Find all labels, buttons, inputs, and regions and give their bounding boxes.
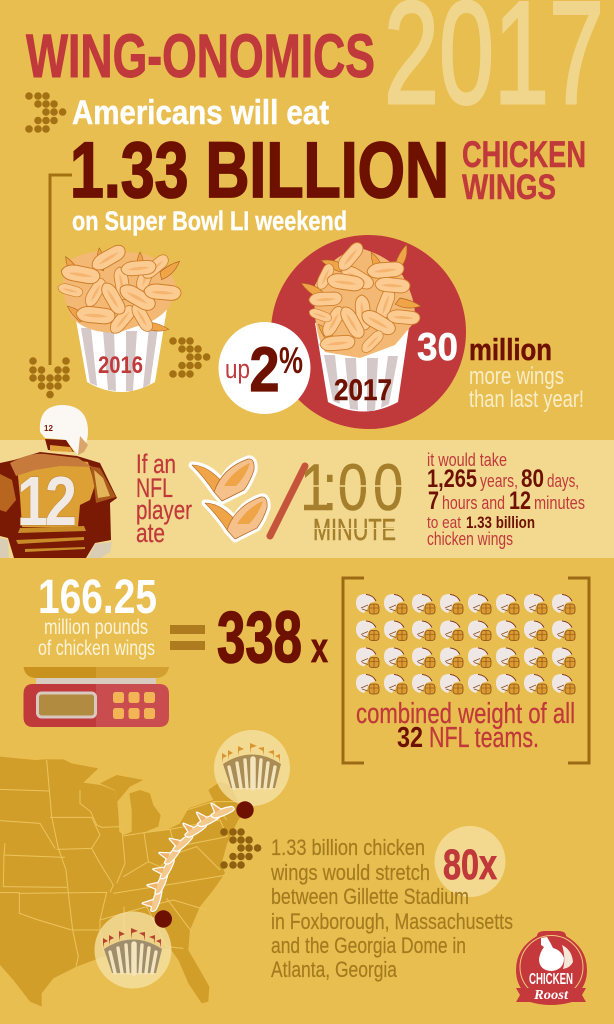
- icon: scale: [24, 667, 169, 727]
- 166.25 million pounds text: of chicken wings: [38, 637, 155, 660]
- if an NFL player ate: If an: [136, 449, 176, 479]
- stretch text block: wings would stretch: [270, 860, 430, 885]
- million: million: [469, 332, 552, 367]
- connector line: [50, 175, 72, 365]
- time to eat text block: 1,265: [427, 465, 477, 493]
- map of eastern United States: [0, 757, 248, 1007]
- wing chain between stadiums: [143, 804, 234, 912]
- 1.33 billion: 1.33 BILLION: [70, 125, 449, 214]
- 30: 30: [417, 326, 458, 369]
- 166.25 million pounds text: million pounds: [44, 616, 148, 639]
- chicken wordmark: CHICKEN: [529, 971, 573, 988]
- Foxborough location marker: [236, 801, 254, 819]
- roost wordmark: Roost: [533, 988, 569, 1003]
- title: WING-ONOMICS: [26, 22, 375, 90]
- 2017 label: 2017: [334, 374, 392, 407]
- up: up: [225, 354, 250, 384]
- flags: [222, 743, 280, 763]
- time to eat text block: [427, 450, 585, 549]
- if an NFL player ate: NFL: [136, 473, 173, 503]
- time to eat text block: it would take: [427, 450, 507, 470]
- stretch text block: and the Georgia Dome in: [271, 933, 466, 958]
- helmet grid: [356, 594, 575, 694]
- percent: %: [279, 340, 303, 381]
- combined weight text: 32: [397, 722, 423, 754]
- Atlanta location marker: [155, 910, 172, 928]
- hands: [0, 538, 112, 558]
- digital clock: [300, 450, 405, 547]
- icon: dotted arrow down: [29, 357, 70, 398]
- icon: two chicken wings: [192, 459, 267, 539]
- 1:00: 1:00: [300, 450, 403, 524]
- wings pile: [57, 242, 183, 338]
- helmet number: 12: [44, 424, 53, 433]
- ribbon: [516, 988, 586, 1005]
- time to eat text block: 1.33 billion: [466, 513, 535, 532]
- 166.25 million pounds text: [38, 571, 157, 660]
- left bracket: [343, 578, 364, 763]
- slash: [270, 466, 305, 536]
- equals sign: [170, 625, 205, 650]
- top stadium circle: [214, 730, 290, 806]
- icon: 2016 bucket: [57, 242, 183, 392]
- icon: football player: [0, 405, 117, 558]
- on Super Bowl LI weekend: on Super Bowl LI weekend: [72, 206, 347, 236]
- stretch text block: Atlanta, Georgia: [271, 957, 398, 982]
- 338 x: x: [311, 624, 328, 671]
- 80x badge: [434, 826, 506, 897]
- combined weight text: NFL teams.: [429, 722, 539, 754]
- 2016 label: 2016: [98, 352, 143, 379]
- 338 x: 338: [217, 598, 302, 678]
- if an NFL player ate: ate: [136, 518, 165, 548]
- stretch text block: [270, 835, 513, 982]
- more wings: more wings: [469, 363, 564, 390]
- logo: Chicken Roost: [516, 931, 587, 1005]
- panel: eating rate band: [0, 440, 614, 558]
- wings pile: [301, 240, 421, 358]
- chicken icon: [539, 937, 573, 971]
- icon: 2017 bucket: [301, 240, 421, 412]
- 30 million stat: [417, 326, 584, 413]
- minute: MINUTE: [313, 512, 396, 547]
- stretch text block: 1.33 billion chicken: [271, 835, 425, 860]
- Americans will eat: Americans will eat: [72, 94, 329, 132]
- time to eat text block: days,: [547, 471, 579, 491]
- helmet: [40, 405, 88, 455]
- time to eat text block: to eat: [427, 513, 461, 532]
- time to eat text block: 7: [428, 487, 439, 515]
- right bracket: [568, 578, 589, 763]
- if an NFL player ate: player: [136, 495, 192, 525]
- icon: dotted arrow to map text: [220, 828, 261, 869]
- time to eat text block: 80: [521, 465, 544, 493]
- flags: [103, 928, 161, 948]
- 80x badge: 80x: [443, 841, 497, 889]
- combined weight text: [356, 698, 575, 754]
- time to eat text block: hours and: [442, 493, 505, 513]
- red circle: [271, 235, 466, 429]
- white circle: up 2%: [218, 322, 310, 414]
- icon: dotted arrow to 2%: [169, 337, 210, 378]
- time to eat text block: years,: [480, 471, 518, 491]
- time to eat text block: 12: [509, 487, 531, 515]
- 2: 2: [250, 335, 280, 405]
- 166.25 million pounds text: 166.25: [38, 571, 157, 624]
- icon: dotted arrow right: [25, 92, 66, 133]
- wings: WINGS: [462, 168, 556, 207]
- jersey number: 12: [17, 462, 77, 540]
- stretch text block: in Foxborough, Massachusetts: [271, 909, 513, 934]
- time to eat text block: chicken wings: [427, 529, 513, 549]
- stretch text block: between Gillette Stadium: [271, 884, 469, 909]
- headline text block: [70, 94, 586, 236]
- time to eat text block: minutes: [534, 493, 585, 513]
- if an NFL player ate: [136, 449, 192, 548]
- bottom stadium circle: [94, 912, 172, 988]
